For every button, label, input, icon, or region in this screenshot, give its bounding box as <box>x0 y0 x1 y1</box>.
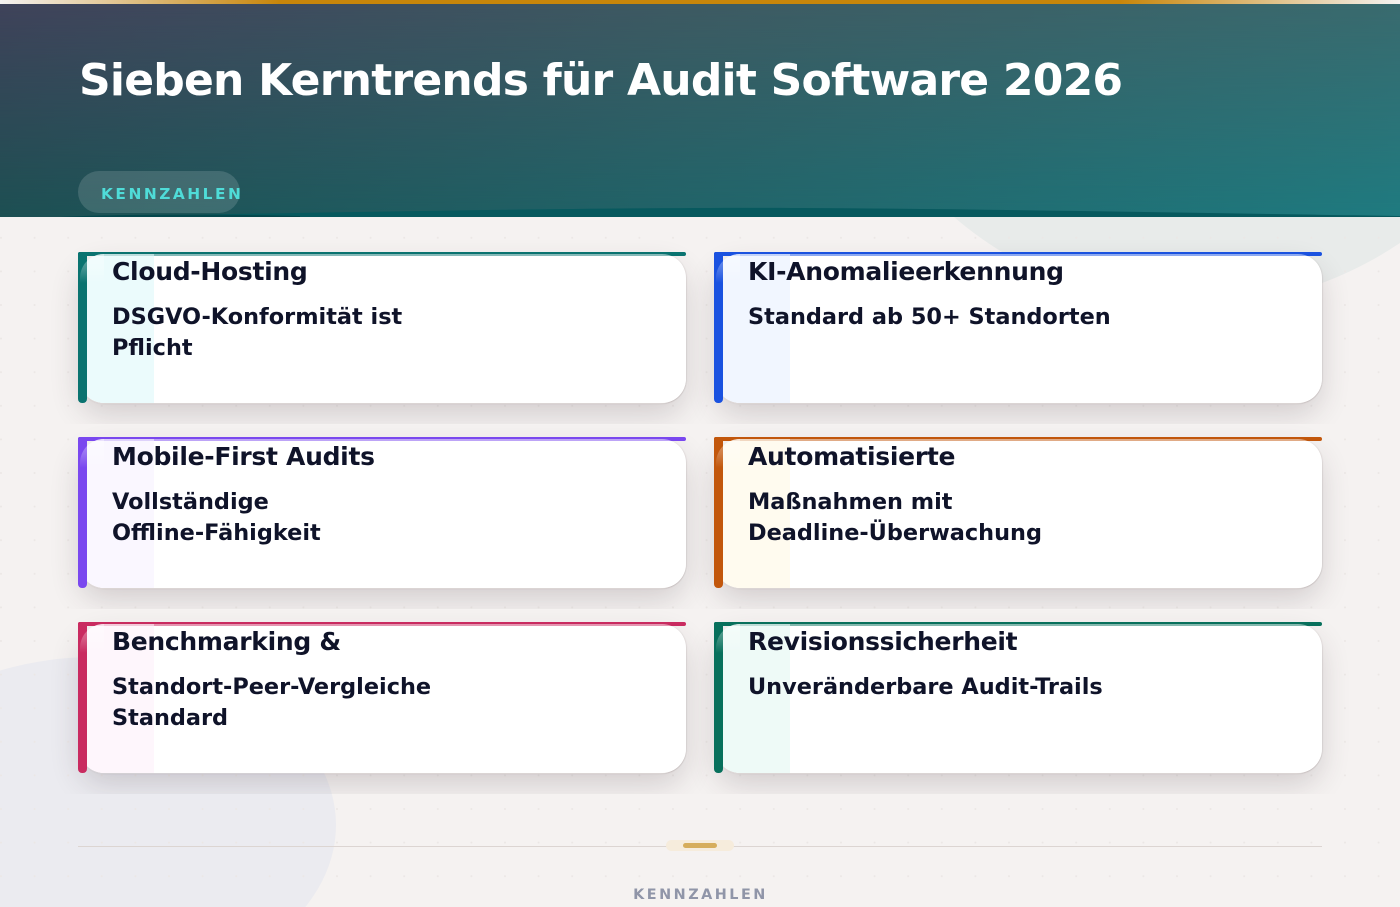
panel: Cloud-Hosting <box>78 252 687 404</box>
panel: Mobile-First Audits: Offline-Fähigkeit <box>112 520 321 546</box>
panel: Cloud-Hosting: DSGVO-Konformität ist <box>112 304 402 330</box>
panel: KI-Anomalieerkennung: Standard ab 50+ Standorten <box>748 304 1111 330</box>
panel: Automatisierte Maßnahmen <box>714 437 1323 589</box>
panel: Mobile-First Audits: Vollständige <box>112 489 269 515</box>
header band <box>0 0 1400 217</box>
badge: Kennzahlen <box>78 170 240 213</box>
title: Sieben Kerntrends für Audit Software 2026 <box>79 55 1122 106</box>
panel: KI-Anomalieerkennung <box>714 252 1323 404</box>
footer divider <box>78 840 1322 851</box>
top accent bar <box>0 0 1400 4</box>
panel: Benchmarking: Standard <box>112 705 228 731</box>
panel: Benchmarking <box>78 622 687 774</box>
panel: Revisionssicherheit: Unveränderbare Audit-Trails <box>748 674 1103 700</box>
panel: Benchmarking: Benchmarking & <box>112 627 341 656</box>
panel: Mobile-First Audits <box>78 437 687 589</box>
panel: Cloud-Hosting: Cloud-Hosting <box>112 257 307 286</box>
panel: Revisionssicherheit: Revisionssicherheit <box>748 627 1017 656</box>
panel: Automatisierte Maßnahmen: Maßnahmen mit <box>748 489 952 515</box>
panel: Mobile-First Audits: Mobile-First Audits <box>112 442 375 471</box>
header wave <box>62 208 1400 217</box>
panel: Automatisierte Maßnahmen: Automatisierte <box>748 442 955 471</box>
panel: KI-Anomalieerkennung: KI-Anomalieerkennung <box>748 257 1064 286</box>
panel: Revisionssicherheit <box>714 622 1323 774</box>
panel: Automatisierte Maßnahmen: Deadline-Überwachung <box>748 520 1042 546</box>
badge: Kennzahlen: KENNZAHLEN <box>101 184 243 202</box>
panel: Cloud-Hosting: Pflicht <box>112 335 193 361</box>
panel: Benchmarking: Standort-Peer-Vergleiche <box>112 674 431 700</box>
footer label: KENNZAHLEN <box>633 887 768 903</box>
